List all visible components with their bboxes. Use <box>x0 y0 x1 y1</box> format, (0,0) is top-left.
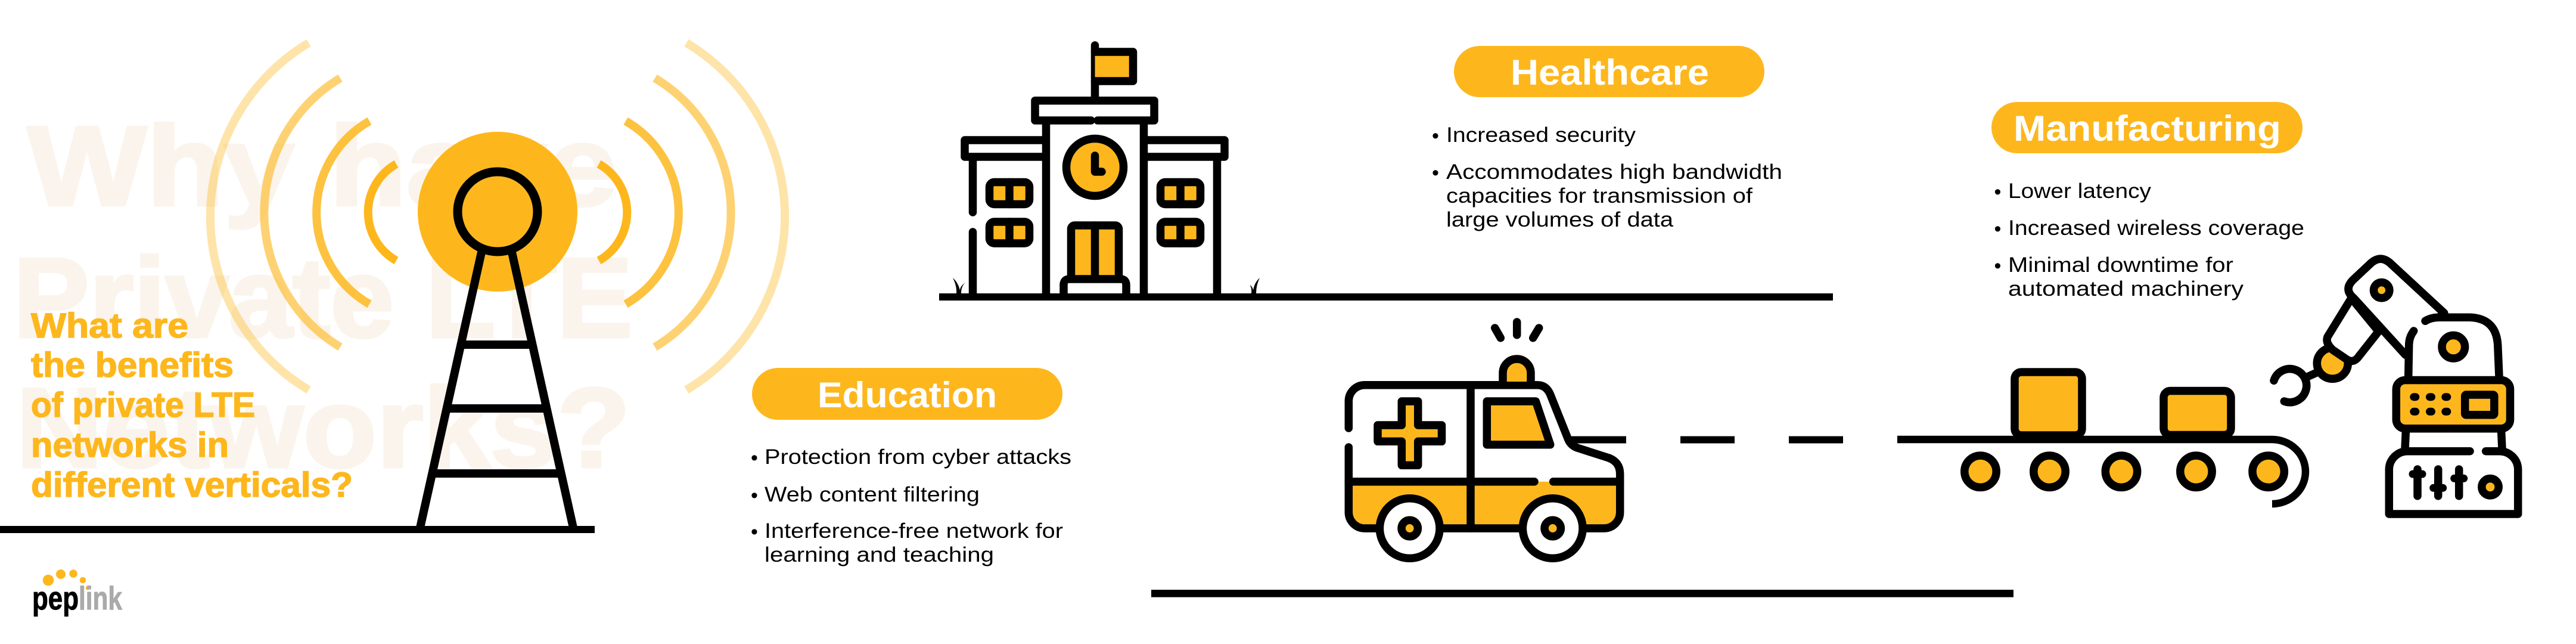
upper arm <box>2348 259 2444 355</box>
list: manufacturing benefits: • <box>1994 218 2001 240</box>
list: education benefits: learning and teaching <box>765 543 994 566</box>
panel: education <box>751 368 1071 566</box>
neck <box>2405 432 2502 449</box>
boxes on conveyor <box>2015 372 2231 435</box>
list: manufacturing benefits: • <box>1994 181 2001 203</box>
list: manufacturing benefits: Increased wireless coverage <box>2008 216 2304 240</box>
tower ground line <box>0 526 595 533</box>
list: healthcare benefits: • <box>1432 125 1439 147</box>
list: manufacturing benefits: • <box>1994 255 2001 277</box>
icon: conveyor belt <box>1897 372 2305 504</box>
list: manufacturing benefits: automated machinery <box>2008 277 2244 301</box>
list: healthcare benefits: Increased security <box>1446 123 1636 147</box>
list: healthcare benefits: large volumes of data <box>1446 208 1674 231</box>
list: education benefits: Interference-free network for <box>765 519 1063 543</box>
logo: peplink: pep <box>32 580 79 617</box>
road ground line <box>1151 590 2013 597</box>
list: education benefits: • <box>751 521 758 543</box>
title: of private LTE <box>31 386 255 425</box>
list: healthcare benefits: • <box>1432 162 1439 184</box>
background ghost title: Why have <box>27 103 617 230</box>
title: different verticals? <box>31 466 353 504</box>
panel: healthcare <box>1432 46 1782 231</box>
list: healthcare benefits: Accommodates high bandwidth <box>1446 160 1782 184</box>
heading: education pill: Education <box>818 375 997 415</box>
list: manufacturing benefits <box>1994 179 2304 301</box>
title: networks in <box>31 426 229 465</box>
list: education benefits: Web content filtering <box>765 483 980 506</box>
background ghost title <box>13 103 633 491</box>
list: manufacturing benefits: Lower latency <box>2008 179 2152 203</box>
list: education benefits: • <box>751 484 758 507</box>
heading: manufacturing pill: Manufacturing <box>2013 109 2281 148</box>
title <box>31 306 353 504</box>
list: healthcare benefits: capacities for transmission of <box>1446 184 1752 208</box>
icon: signal waves <box>210 43 785 390</box>
forearm <box>2327 298 2379 361</box>
heading: manufacturing pill <box>1991 102 2302 153</box>
list: education benefits: • <box>751 447 758 469</box>
list: education benefits: Protection from cyber attacks <box>765 445 1071 469</box>
road dashes <box>1571 436 1843 444</box>
heading: education pill <box>752 368 1062 420</box>
list: education benefits <box>751 445 1071 566</box>
title: the benefits <box>31 346 234 385</box>
logo: peplink: link <box>79 580 122 617</box>
control panel <box>2396 380 2510 429</box>
logo: peplink <box>32 569 122 617</box>
icon: school building <box>953 45 1260 293</box>
shoulder <box>2409 321 2497 377</box>
icon: LTE tower <box>418 132 577 528</box>
title: What are <box>31 306 188 345</box>
wrist and claw <box>2274 348 2348 402</box>
school ground line <box>939 293 1833 301</box>
icon: ambulance <box>1348 322 1620 558</box>
background ghost title: Networks? <box>16 365 630 491</box>
base <box>2389 451 2518 514</box>
list: manufacturing benefits: Minimal downtime for <box>2008 253 2233 277</box>
heading: healthcare pill <box>1454 46 1764 97</box>
panel: manufacturing <box>1991 102 2304 301</box>
heading: healthcare pill: Healthcare <box>1511 52 1709 92</box>
rollers <box>1965 456 2284 487</box>
list: healthcare benefits <box>1432 123 1782 231</box>
icon: robot arm <box>2274 259 2518 514</box>
background ghost title: Private LTE <box>13 235 633 361</box>
